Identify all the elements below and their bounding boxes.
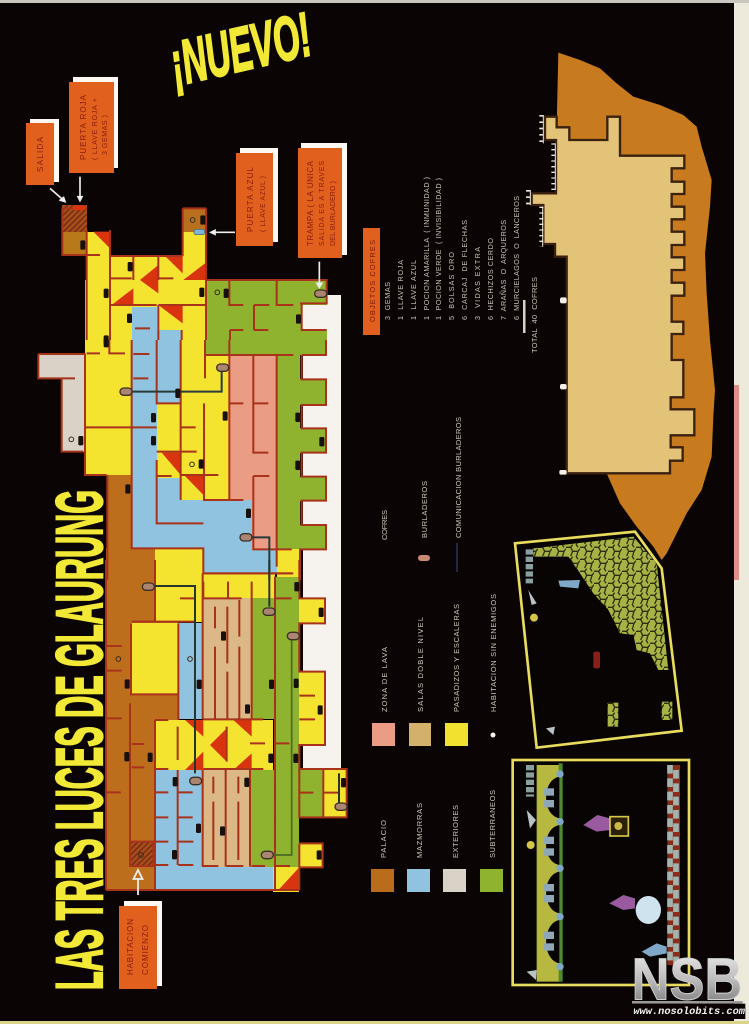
callout: salida: SALIDA (36, 136, 45, 172)
arrow: habitacion comienzo (134, 870, 142, 895)
castle battlements (528, 115, 555, 247)
callout: puerta azul: ( LLAVE AZUL ) (260, 176, 267, 232)
legend: pasadizos y escaleras: PASADIZOS Y ESCALERAS (452, 604, 461, 712)
legend: pasadizos y escaleras (445, 604, 468, 746)
arrow: trampa (317, 262, 322, 287)
rock blocks (608, 702, 672, 727)
logo: www.nosolobits.com (633, 1006, 746, 1018)
callout: puerta roja: PUERTA ROJA (79, 94, 88, 160)
heading: objetos cofres (363, 228, 380, 335)
total cofres: TOTAL 40 COFRES (530, 277, 539, 353)
callout: trampa: TRAMPA ( LA UNICA (306, 160, 315, 246)
rock staircase (533, 537, 668, 670)
callout: habitacion comienzo: HABITACION (126, 919, 135, 975)
sprites (528, 549, 600, 735)
callout: puerta azul (236, 148, 278, 246)
callout: trampa (298, 143, 347, 258)
callout: trampa: SALIDA ES A TRAVES (319, 161, 326, 246)
legend: salas doble nivel: SALAS DOBLE NIVEL (416, 617, 425, 712)
callout: puerta roja (69, 77, 118, 173)
list: objetos cofres: 1 LLAVE AZUL (409, 260, 418, 320)
list: objetos cofres: 1 POCION VERDE ( INVISIBILIDAD ) (434, 178, 443, 320)
list: objetos cofres: 1 LLAVE ROJA (396, 260, 405, 320)
callout: habitacion comienzo (119, 901, 162, 989)
legend: burladeros: BURLADEROS (420, 481, 429, 538)
legend: cofres: COFRES (380, 510, 389, 540)
map top section walls and icons (62, 205, 327, 345)
arrow: salida (50, 188, 65, 202)
map middle section walls and icons (38, 338, 326, 580)
legend: exteriores (443, 805, 466, 892)
callout: trampa: DEL BURLADERO ) (330, 181, 337, 246)
list: objetos cofres: 6 CARCAJ DE FLECHAS (460, 220, 469, 320)
list: objetos cofres: 7 ARAÑAS O ARQUEROS (499, 220, 508, 320)
heading: objetos cofres: OBJETOS COFRES (368, 240, 377, 322)
screenshot: tilted level (515, 532, 682, 748)
legend: palacio: PALACIO (379, 820, 388, 858)
screenshot: corridor (513, 760, 689, 985)
list: objetos cofres: 6 HECHIZOS CERDO (486, 238, 495, 320)
arrow: puerta roja (78, 177, 82, 201)
arches and ceiling (537, 763, 564, 982)
list: objetos cofres: 1 POCION AMARILLA ( INMUNIDAD ) (422, 177, 431, 320)
total divider (523, 300, 526, 333)
legend: mazmorras: MAZMORRAS (415, 803, 424, 858)
list: objetos cofres: 3 VIDAS EXTRA (473, 247, 482, 320)
legend: subterraneos (480, 790, 503, 892)
callout: puerta roja: 3 GEMAS ) (102, 115, 109, 155)
arrow: puerta azul (211, 230, 235, 234)
map (38, 205, 347, 892)
legend: zona de lava: ZONA DE LAVA (380, 647, 389, 712)
list: objetos cofres: 5 BOLSAS ORO (447, 252, 456, 320)
legend: salas doble nivel (409, 617, 431, 746)
castle terrain (557, 53, 715, 560)
sprites (527, 765, 667, 980)
map lower section walls and icons (106, 560, 347, 890)
legend: zona de lava (372, 647, 395, 746)
castle gates (559, 297, 567, 475)
legend: comunicacion burladeros: COMUNICACION BURLADEROS (454, 417, 463, 538)
castle floor (532, 117, 694, 473)
callout: salida (26, 119, 59, 185)
callout: habitacion comienzo: COMIENZO (141, 925, 150, 975)
list: objetos cofres (383, 177, 521, 320)
pillar column (667, 765, 680, 965)
legend: palacio (371, 820, 394, 892)
legend: mazmorras (407, 803, 430, 892)
legend: burladeros (418, 481, 430, 561)
legend: habitacion sin enemigos: HABITACION SIN ENEMIGOS (489, 594, 498, 712)
list: objetos cofres: 6 MURCIELAGOS O LANCEROS (512, 196, 521, 320)
legend (371, 417, 503, 892)
legend: subterraneos: SUBTERRANEOS (488, 790, 497, 858)
list: objetos cofres: 3 GEMAS (383, 282, 392, 320)
castle plan (528, 53, 715, 560)
callout: puerta roja: ( LLAVE ROJA + (92, 98, 99, 160)
callout: puerta azul: PUERTA AZUL (246, 166, 255, 232)
legend: exteriores: EXTERIORES (451, 805, 460, 858)
map room fills (38, 205, 347, 892)
